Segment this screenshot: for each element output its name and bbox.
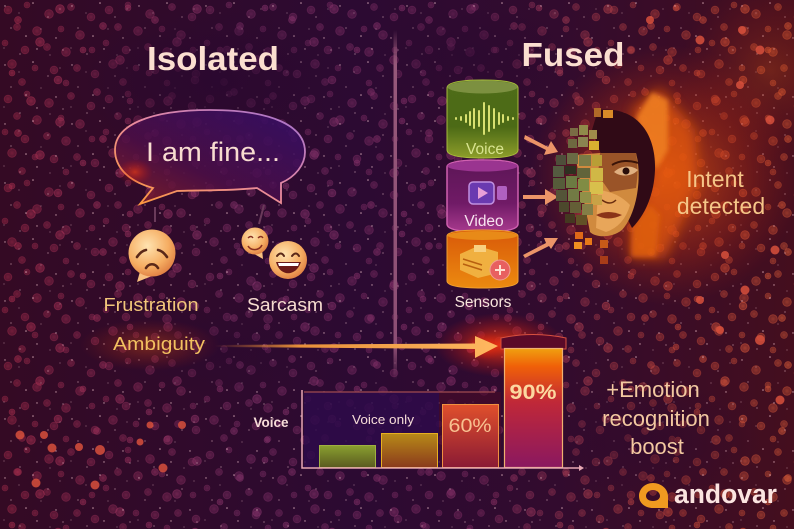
logo icon (639, 483, 668, 508)
connectors from bubble to emojis (155, 205, 264, 224)
chart panel (304, 392, 439, 467)
callout: emotion recognition boost: boost (630, 434, 684, 459)
bar: 60% (442, 404, 498, 468)
arrow: ambiguity to 90% bar (215, 332, 505, 360)
cylinder: Voice: Voice (466, 141, 504, 158)
icon: video camera (469, 182, 507, 204)
central divider (394, 30, 397, 380)
value: 60%: 60% (448, 416, 492, 437)
cylinder: Sensors (447, 230, 518, 288)
label: Frustration: Frustration (104, 295, 198, 315)
label: Sensors: Sensors (455, 294, 512, 311)
bar: voice (320, 446, 376, 468)
label: Intent detected: detected (677, 193, 765, 219)
cylinder: Video (447, 160, 518, 232)
bar: voice only (382, 434, 438, 468)
speech bubble (115, 110, 305, 204)
callout: emotion recognition boost: recognition (602, 406, 710, 431)
heading: Isolated: Isolated (147, 40, 279, 77)
cylinder: Voice (447, 80, 518, 158)
glow behind head (630, 88, 698, 258)
arrows into face (523, 135, 558, 258)
value: 90%: 90% (510, 381, 557, 404)
face with mosaic (553, 88, 698, 264)
bar chart (302, 334, 584, 471)
mosaic squares (553, 108, 613, 264)
orange hair streaks (636, 92, 668, 170)
label: Intent detected: Intent (686, 166, 744, 192)
label: Sarcasm: Sarcasm (247, 295, 323, 315)
bar: 90% cap (501, 334, 566, 349)
cylinder: Video: Video (464, 213, 504, 230)
nose and lips (602, 200, 616, 203)
bar: 90% (504, 348, 562, 468)
label: Voice only: Voice only (352, 412, 415, 427)
heading: Fused: Fused (522, 36, 624, 73)
axis label: Voice: Voice (254, 415, 289, 430)
logo wordmark: andovar (674, 479, 777, 509)
hair (592, 110, 655, 228)
face skin (575, 153, 639, 236)
bubble text: I am fine... (146, 137, 280, 167)
eye (612, 161, 638, 176)
callout: emotion recognition boost: +Emotion (606, 377, 700, 402)
label: Ambiguity: Ambiguity (113, 334, 205, 354)
axes (302, 390, 580, 468)
icon: waveform (456, 103, 513, 134)
icon: sensor box (460, 245, 510, 280)
logo: andovar (639, 479, 777, 509)
icon: sarcasm emojis (242, 228, 307, 279)
icon: frustrated emoji (128, 230, 176, 282)
